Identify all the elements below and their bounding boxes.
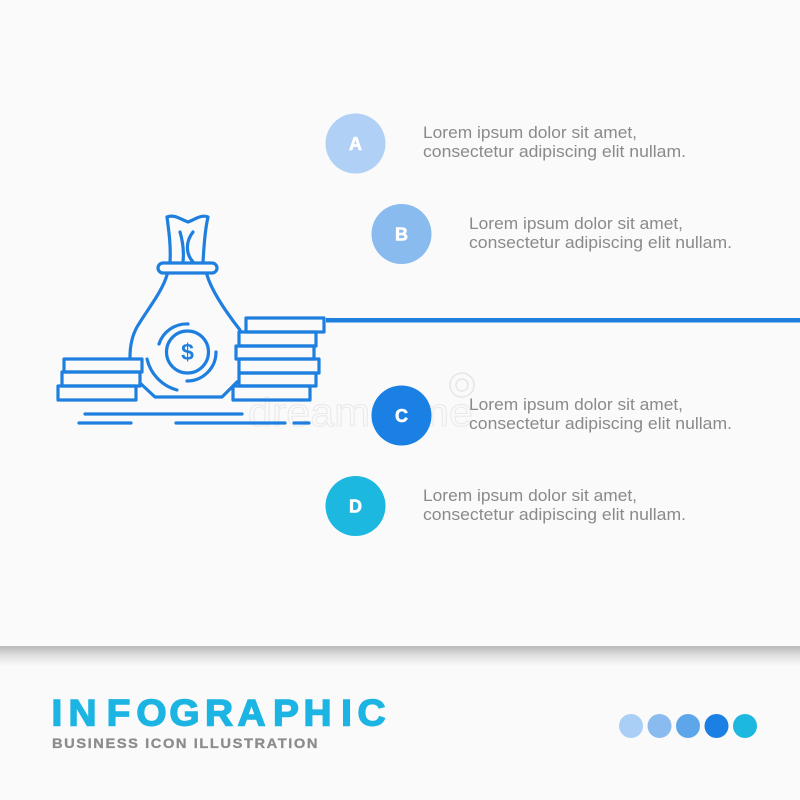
bag body	[130, 275, 240, 397]
connector line	[326, 318, 800, 322]
item D: D	[349, 496, 362, 516]
subtitle: BUSINESS ICON ILLUSTRATION	[52, 735, 319, 751]
item B: B	[395, 224, 408, 244]
item C: consectetur adipiscing elit nullam.	[469, 414, 732, 433]
item B	[372, 204, 732, 264]
bag tie	[158, 263, 217, 273]
item A: Lorem ipsum dolor sit amet,	[423, 123, 637, 142]
watermark	[248, 373, 474, 435]
item C	[372, 386, 732, 446]
dollar coin	[147, 324, 216, 390]
icon: money bag with coin stacks	[58, 216, 324, 423]
item C: Lorem ipsum dolor sit amet,	[469, 395, 683, 414]
left coin stack	[58, 359, 142, 400]
bag neck	[167, 216, 208, 262]
item A: A	[349, 134, 362, 154]
right coin stack	[233, 318, 324, 400]
footer shadow band	[0, 646, 800, 666]
item D: Lorem ipsum dolor sit amet,	[423, 486, 637, 505]
item D	[326, 476, 686, 536]
item C: C	[395, 406, 408, 426]
watermark: dreamstime	[248, 391, 473, 435]
ground lines	[79, 414, 309, 423]
title: INFOGRAPHIC	[52, 693, 386, 734]
item A: consectetur adipiscing elit nullam.	[423, 142, 686, 161]
item B: Lorem ipsum dolor sit amet,	[469, 214, 683, 233]
dollar coin: $	[181, 339, 194, 365]
item D: consectetur adipiscing elit nullam.	[423, 505, 686, 524]
palette dots	[619, 714, 757, 738]
item A	[326, 114, 686, 174]
item B: consectetur adipiscing elit nullam.	[469, 233, 732, 252]
